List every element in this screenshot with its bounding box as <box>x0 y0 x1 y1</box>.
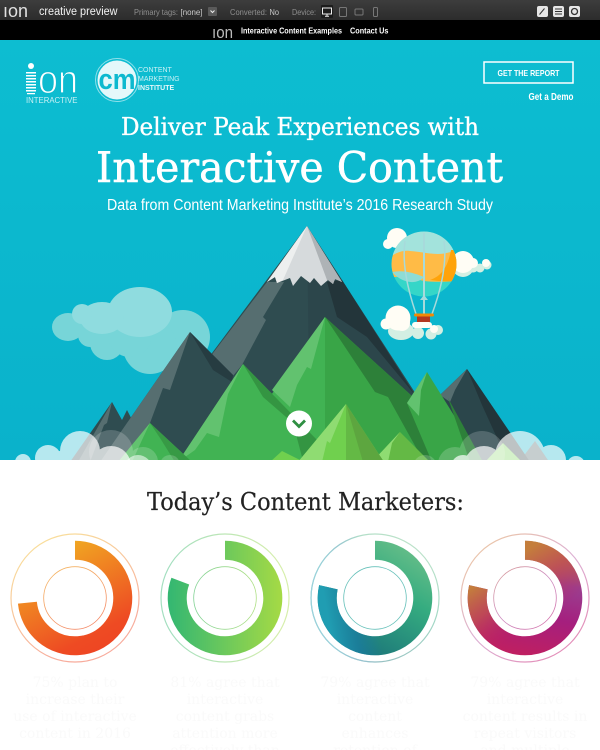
faded stat text 3: content <box>348 709 402 725</box>
faded stat text 3: 79% agree that <box>320 675 430 691</box>
main peak <box>212 226 414 396</box>
faded stat text 1: content in 2016 <box>19 726 131 742</box>
toolbar ion logo: ıon <box>3 1 28 21</box>
get a demo link: Get a Demo <box>528 92 574 103</box>
get the report button: GET THE REPORT <box>498 68 560 78</box>
ion interactive logo: on <box>38 58 78 102</box>
converted value: No <box>270 7 279 17</box>
hot air balloon <box>380 228 492 340</box>
ground clouds left <box>15 431 130 460</box>
balloon envelope <box>388 230 458 315</box>
action icons <box>537 6 580 17</box>
ion interactive logo <box>26 58 78 105</box>
scroll down button <box>286 410 312 436</box>
cloud behind balloon <box>383 228 492 277</box>
small left green peak <box>120 423 190 460</box>
centre green mountain <box>272 317 431 460</box>
ion interactive logo: INTERACTIVE <box>26 96 78 105</box>
mountain range <box>15 226 584 460</box>
device label: Device: <box>292 7 316 17</box>
snow cap <box>267 226 342 286</box>
cloud below balloon <box>380 306 443 340</box>
small light green peak <box>379 432 428 460</box>
faded stat text 2: content grabs <box>176 709 274 725</box>
faded stat text 1: use of interactive <box>13 709 137 725</box>
contact link: Contact Us <box>350 26 389 36</box>
faint cloud layer <box>89 430 505 460</box>
headline line two: Interactive Content <box>96 143 503 192</box>
faded stat text 4: interactive <box>487 692 563 708</box>
converted label: Converted: <box>230 7 267 17</box>
right green mountain <box>407 372 483 462</box>
content marketing institute logo <box>96 58 180 102</box>
small front peak <box>272 451 300 460</box>
nav bar <box>0 20 600 42</box>
cmi wordmark: CONTENT <box>138 67 173 74</box>
ground clouds right <box>453 431 584 460</box>
hero background <box>0 40 600 460</box>
preview toolbar <box>0 0 600 21</box>
pale cloud <box>52 287 210 374</box>
right dark mountain <box>440 369 528 460</box>
nav links: Interactive Content Examples <box>241 26 342 36</box>
lime peak behind right cloud <box>487 443 520 460</box>
headline line one: Deliver Peak Experiences with <box>121 112 479 141</box>
cm letters: cm <box>98 64 136 96</box>
faded stat text 3: enhances <box>342 726 408 742</box>
faded stat text 1: increase their <box>26 692 125 708</box>
second dark mountain <box>102 332 234 460</box>
faded stat text 4: repeat visitors <box>474 726 576 742</box>
subheadline: Data from Content Marketing Institute’s 2016 Research Study <box>107 197 493 214</box>
primary tags label: Primary tags: <box>134 7 178 17</box>
cmi wordmark: INSTITUTE <box>138 85 174 92</box>
faded stat text 4: 79% agree that <box>470 675 580 691</box>
toolbar title: creative preview <box>39 6 118 18</box>
get the report button <box>484 62 573 83</box>
primary tags value: [none] <box>180 7 202 17</box>
far right small peak <box>525 441 548 460</box>
ground clouds left highlight <box>128 455 148 460</box>
device icons <box>321 5 378 18</box>
faded stat text 3: interactive <box>337 692 413 708</box>
donut: 81 percent <box>161 534 289 662</box>
front light green peak <box>298 404 384 462</box>
section heading: Today’s Content Marketers: <box>147 488 464 516</box>
donut: 79 percent retention <box>311 534 439 662</box>
faded stat text 1: 75% plan to <box>33 675 117 691</box>
cmi wordmark: MARKETING <box>138 76 180 83</box>
donut: 79 percent repeat visitors <box>461 534 589 662</box>
faded stat text 2: 81% agree that <box>170 675 280 691</box>
nav logo: ıon <box>212 23 233 42</box>
balloon basket <box>414 314 434 324</box>
faded stat text 2: attention more <box>172 726 278 742</box>
small back peaks <box>72 402 131 460</box>
donut: 75 percent <box>11 534 139 662</box>
dropdown <box>208 7 217 16</box>
faded stat text 4: content results in <box>463 709 587 725</box>
left green mountain <box>183 364 316 460</box>
faded stat text 2: interactive <box>187 692 263 708</box>
